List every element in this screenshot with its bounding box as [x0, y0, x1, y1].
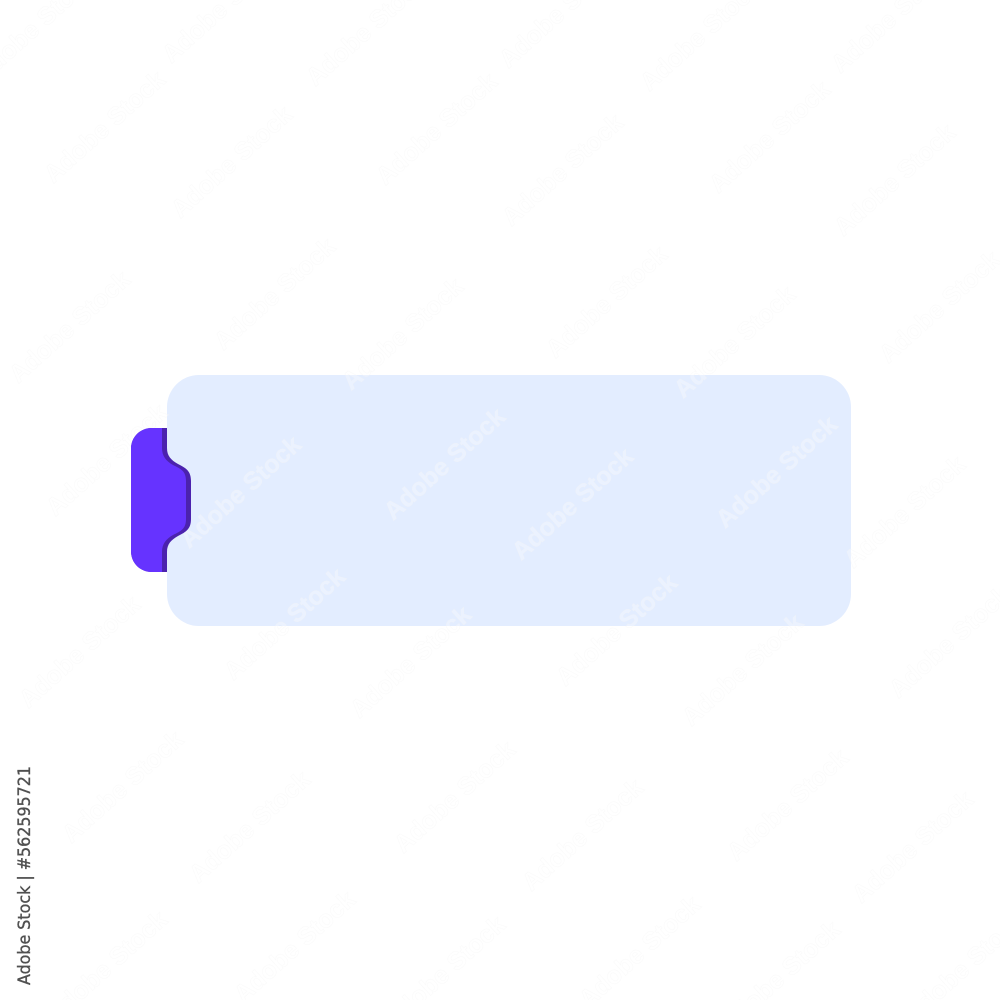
watermark: repeated stock marks: Adobe Stock [847, 785, 979, 909]
watermark: repeated stock marks: Adobe Stock [184, 765, 316, 889]
watermark: repeated stock marks: Adobe Stock [541, 240, 673, 364]
icon: purple side tab [131, 428, 191, 572]
watermark: repeated stock marks: Adobe Stock [669, 280, 801, 404]
watermark: repeated stock marks: Adobe Stock [39, 65, 171, 189]
watermark: repeated stock marks: Adobe Stock [209, 232, 341, 356]
watermark: repeated stock marks: Adobe Stock [497, 108, 629, 232]
watermark: repeated stock marks: Adobe Stock [219, 562, 351, 686]
watermark: repeated stock marks: Adobe Stock [711, 410, 843, 534]
credit: vertical stock id text: Adobe Stock | #562595721 [15, 766, 35, 985]
watermark: repeated stock marks: Adobe Stock [14, 590, 146, 714]
watermark: repeated stock marks: Adobe Stock [389, 735, 521, 859]
watermark: repeated stock marks: Adobe Stock [337, 272, 469, 396]
watermark: repeated stock marks: Adobe Stock [175, 430, 307, 554]
watermark: repeated stock marks: Adobe Stock [722, 743, 854, 867]
watermark: repeated stock marks: Adobe Stock [829, 118, 961, 242]
watermark: repeated stock marks: Adobe Stock [345, 600, 477, 724]
watermark: repeated stock marks: Adobe Stock [704, 75, 836, 199]
watermark: repeated stock marks: Adobe Stock [371, 67, 503, 191]
panel: blank light blue card [167, 375, 851, 626]
watermark: repeated stock marks: Adobe Stock [4, 265, 136, 389]
watermark: repeated stock marks: Adobe Stock [166, 100, 298, 224]
watermark: repeated stock marks: Adobe Stock [41, 398, 173, 522]
watermark: repeated stock marks: Adobe Stock [507, 442, 639, 566]
watermark: repeated stock marks: Adobe Stock [677, 608, 809, 732]
watermark: repeated stock marks: Adobe Stock [57, 725, 189, 849]
watermark: repeated stock marks: Adobe Stock [551, 568, 683, 692]
watermark: repeated stock marks: Adobe Stock [379, 402, 511, 526]
watermark: repeated stock marks: Adobe Stock [517, 773, 649, 897]
watermark: repeated stock marks: Adobe Stock [839, 450, 971, 574]
